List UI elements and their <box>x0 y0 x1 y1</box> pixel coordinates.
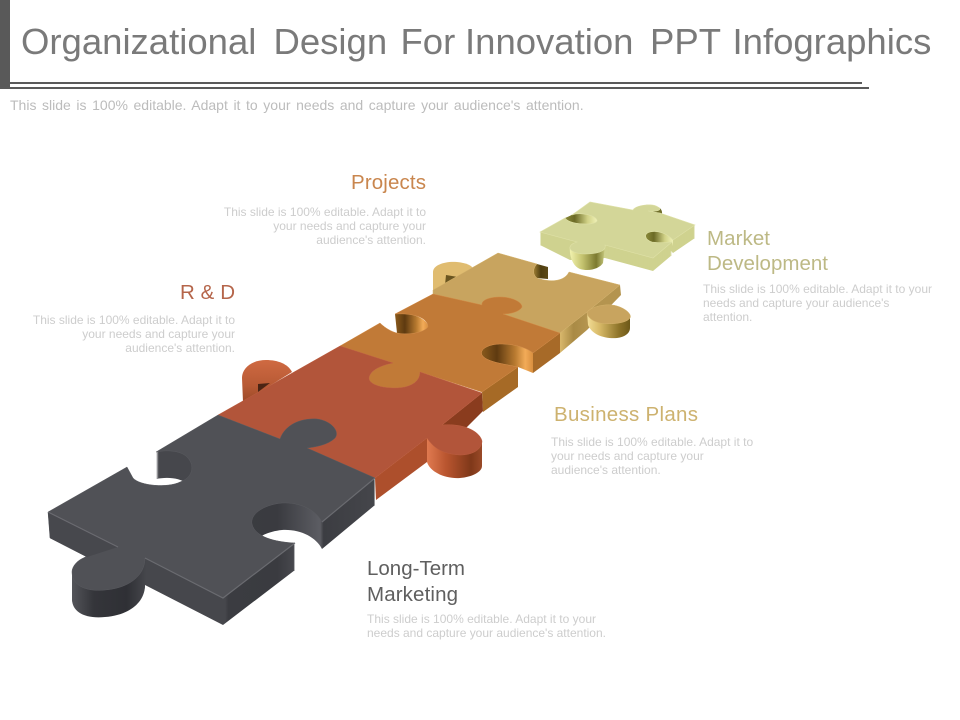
header accent bar <box>0 0 10 88</box>
tan rear knob <box>433 262 474 292</box>
red front wall <box>375 438 427 500</box>
title: For <box>400 21 455 62</box>
description: projects: This slide is 100% editable. Adapt it to <box>224 205 426 219</box>
label: market development: Market <box>707 227 770 250</box>
description: R and D: audience's attention. <box>125 341 235 355</box>
label: business plans: Business Plans <box>554 403 698 426</box>
description: long-term marketing: This slide is 100% editable. Adapt it to your <box>367 612 596 626</box>
description: business plans: your needs and capture your <box>551 449 704 463</box>
description: R and D: This slide is 100% editable. Adapt it to <box>33 313 235 327</box>
grey edge highlights <box>48 478 375 598</box>
tan knob wall <box>587 312 630 338</box>
label: long-term marketing <box>367 557 606 640</box>
description: projects: your needs and capture your <box>273 219 426 233</box>
description: market development: needs and capture your audience's <box>703 296 889 310</box>
description: market development: This slide is 100% editable. Adapt it to your <box>703 282 932 296</box>
tan right walls <box>587 285 621 330</box>
puzzle piece: projects <box>433 253 630 353</box>
description: business plans <box>551 435 753 477</box>
label: long-term marketing: Long-Term <box>367 557 465 580</box>
label: R and D <box>33 281 235 355</box>
title: Organizational <box>21 21 256 62</box>
label: projects: Projects <box>351 171 426 194</box>
orange right walls <box>533 333 560 373</box>
title: Infographics <box>732 21 931 62</box>
description: R and D <box>33 313 235 355</box>
header rules <box>0 82 869 89</box>
green rear knob <box>633 205 662 216</box>
orange rear hole <box>395 314 428 334</box>
subtitle: This slide is 100% editable. Adapt it to your needs and capture your audience's attention. <box>10 97 584 113</box>
description: R and D: your needs and capture your <box>82 327 235 341</box>
description: projects: audience's attention. <box>316 233 426 247</box>
puzzle piece: R and D <box>218 346 483 500</box>
tan notch wall <box>534 264 548 279</box>
label: long-term marketing: Marketing <box>367 583 458 606</box>
title: Design <box>274 21 387 62</box>
green holes <box>565 214 597 224</box>
label: projects <box>224 171 426 247</box>
description: long-term marketing: needs and capture your audience's attention. <box>367 626 606 640</box>
puzzle piece: long-term marketing <box>48 415 375 625</box>
red rear knob <box>242 360 292 402</box>
label: market development: Development <box>707 252 828 275</box>
title: PPT <box>650 21 721 62</box>
label: business plans <box>551 403 753 477</box>
description: business plans: This slide is 100% editable. Adapt it to <box>551 435 753 449</box>
label: R and D: R & D <box>180 281 235 304</box>
grey left wall <box>48 512 118 557</box>
description: market development: attention. <box>703 310 752 324</box>
label: market development <box>703 227 932 324</box>
orange front hole <box>481 344 533 373</box>
puzzle piece: market development <box>540 202 695 271</box>
description: long-term marketing <box>367 612 606 640</box>
description: business plans: audience's attention. <box>551 463 661 477</box>
red knob wall <box>427 438 482 478</box>
puzzle piece: business plans <box>340 294 560 412</box>
red right wall <box>442 393 483 428</box>
green front knob wall <box>570 245 605 270</box>
description: market development <box>703 282 932 324</box>
description: projects <box>224 205 426 247</box>
title: Innovation <box>465 21 633 62</box>
